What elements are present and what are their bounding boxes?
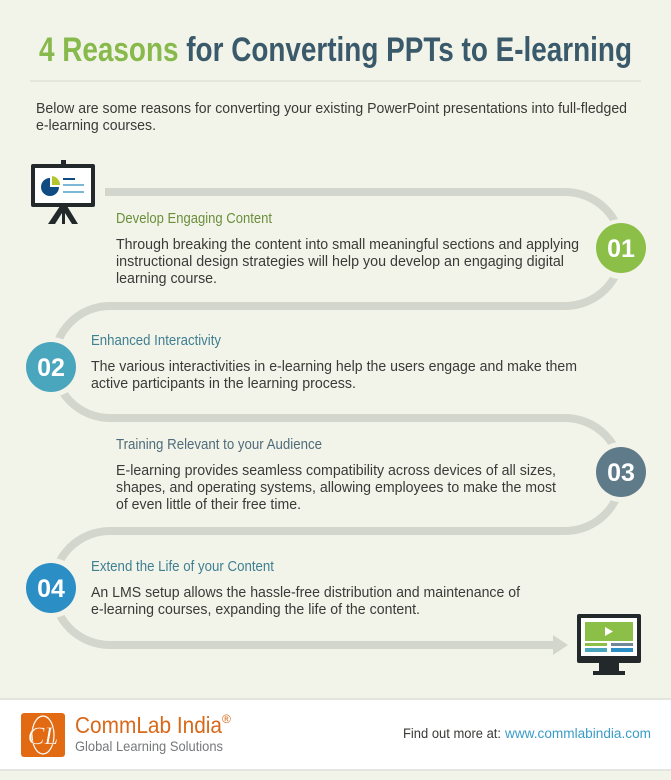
section 02: The various interactivities in e-learning help the users engage and make them — [91, 359, 577, 375]
section 04: e-learning courses, expanding the life of the content. — [91, 602, 420, 618]
intro text — [36, 101, 627, 134]
section 03: of even little of their free time. — [116, 497, 301, 513]
badge 02 — [21, 337, 81, 397]
section 03: E-learning provides seamless compatibility across devices of all sizes, — [116, 463, 556, 479]
section 04 — [91, 558, 521, 618]
section 02 — [91, 332, 577, 392]
footer link text: Find out more at: — [403, 726, 501, 741]
section 01: Through breaking the content into small meaningful sections and applying — [116, 237, 579, 253]
logo: CommLab India — [21, 712, 231, 757]
icon: monitor with video — [577, 614, 641, 675]
logo: CommLab India: CL — [28, 723, 58, 750]
section 01 — [116, 210, 579, 287]
section 04: An LMS setup allows the hassle-free distribution and maintenance of — [91, 585, 521, 601]
section 02: Enhanced Interactivity — [91, 332, 221, 349]
badge 02: 02 — [37, 354, 65, 382]
logo: CommLab India: CommLab India — [75, 712, 222, 738]
intro text: e-learning courses. — [36, 118, 156, 134]
badge 01 — [591, 219, 651, 279]
badge 01: 01 — [607, 235, 635, 263]
logo: CommLab India: Global Learning Solutions — [75, 738, 223, 754]
footer link text — [403, 726, 651, 741]
section 03: shapes, and operating systems, allowing employees to make the most — [116, 480, 556, 496]
section 03 — [116, 436, 556, 513]
badge 04: 04 — [37, 575, 65, 603]
logo: CommLab India: ® — [222, 712, 231, 726]
badge 03 — [591, 442, 651, 502]
badge 04 — [21, 558, 81, 618]
section 04: Extend the Life of your Content — [91, 558, 275, 575]
section 01: learning course. — [116, 271, 217, 287]
section 03: Training Relevant to your Audience — [116, 436, 322, 453]
footer link text: www.commlabindia.com — [504, 726, 651, 741]
winding path with arrow — [53, 192, 622, 655]
section 01: Develop Engaging Content — [116, 210, 273, 227]
badge 03: 03 — [607, 459, 635, 487]
intro text: Below are some reasons for converting your existing PowerPoint presentations into full-fledged — [36, 101, 627, 117]
icon: presentation board — [31, 160, 95, 224]
footer band — [0, 698, 671, 771]
section 02: active participants in the learning process. — [91, 376, 356, 392]
section 01: instructional design strategies will help you develop an engaging digital — [116, 254, 564, 270]
